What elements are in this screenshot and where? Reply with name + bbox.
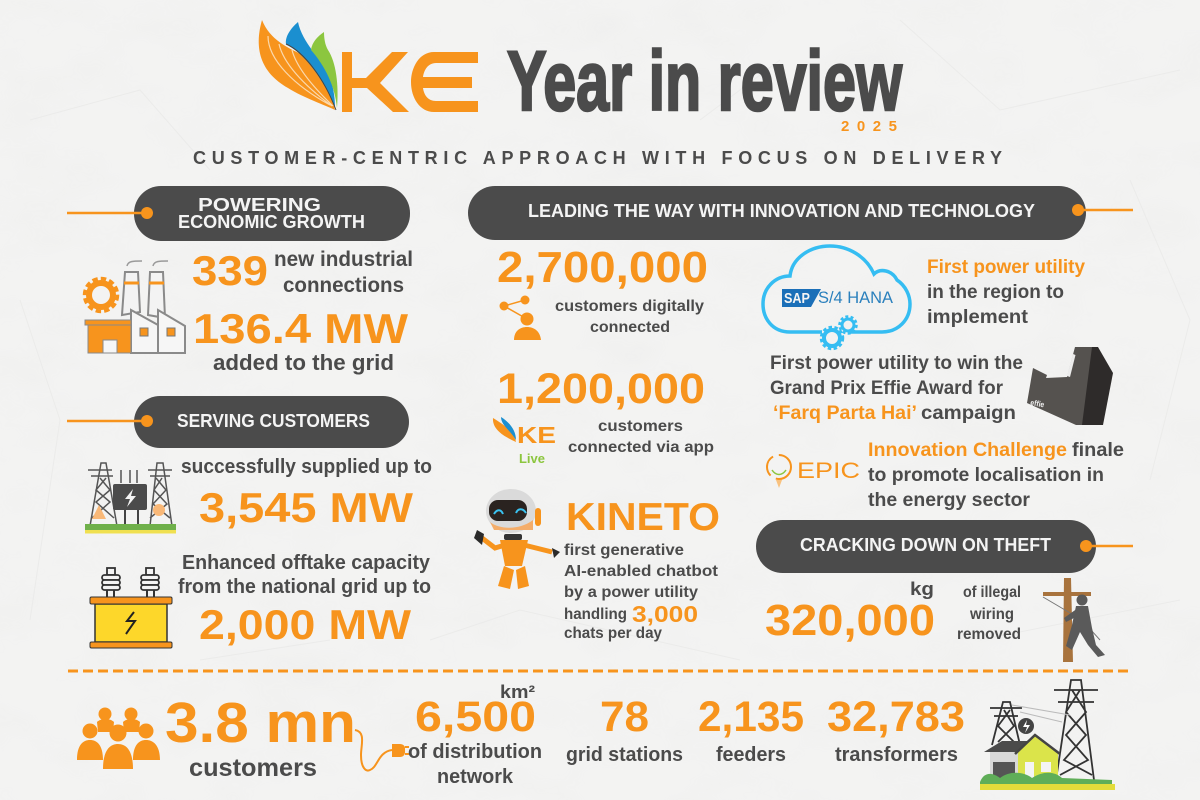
panel: customers total xyxy=(77,691,409,782)
icon: Effie trophy xyxy=(1027,347,1113,425)
stat: 320,000 kg: kg xyxy=(910,579,934,599)
stat: 1,200,000 customers connected via app: connected via app xyxy=(568,439,714,456)
stat: 320,000 kg xyxy=(765,579,935,645)
stat: 2,700,000 customers digitally connected xyxy=(497,243,708,340)
text: enhanced offtake capacity xyxy=(178,552,431,598)
text: Grand Prix Effie Award: First power utility to win the xyxy=(770,353,1023,374)
stat: 136.4 MW added to the grid: 136.4 MW xyxy=(193,305,408,352)
icon: EPIC logo: EPIC xyxy=(797,458,860,483)
stat: 32,783 transformers xyxy=(827,693,965,766)
heading pill: cracking down on theft xyxy=(756,520,1133,573)
stat: 78 grid stations xyxy=(566,693,683,766)
panel: EPIC innovation challenge xyxy=(767,439,1124,511)
icon: worker on pole xyxy=(1043,578,1105,662)
heading pill: powering economic growth xyxy=(67,186,410,241)
stat: 3.8 mn: 3.8 mn xyxy=(165,691,356,755)
panel: serving customers xyxy=(67,396,432,648)
heading pill: serving customers: SERVING CUSTOMERS xyxy=(177,411,370,431)
stat: 6,500 km2 of distribution network: 6,500 xyxy=(415,693,536,741)
heading pill: leading the way with innovation and technology: LEADING THE WAY WITH INNOVATION AND TECHNOLOGY xyxy=(528,201,1035,221)
stat: 2,700,000 customers digitally connected: 2,700,000 xyxy=(497,243,708,292)
stat: 2,700,000 customers digitally connected: customers digitally xyxy=(555,298,704,315)
panel: cracking down on theft xyxy=(756,520,1133,662)
panel: powering economic growth xyxy=(67,186,413,375)
stat: 339 new industrial connections: 339 xyxy=(192,247,268,294)
stat: 6,500 km2 of distribution network xyxy=(408,682,542,788)
text: chatbot description: AI-enabled chatbot xyxy=(564,563,719,580)
panel: KINETO chatbot xyxy=(474,489,720,642)
stat: KINETO: KINETO xyxy=(566,496,720,539)
stat: 1,200,000 customers connected via app xyxy=(493,365,714,466)
stat: 339 new industrial connections: new industrial xyxy=(274,248,413,271)
label: customers: customers xyxy=(189,754,317,782)
stat: 339 new industrial connections: connections xyxy=(283,274,404,297)
logo letters KE xyxy=(342,52,478,112)
text: first power utility in the region xyxy=(927,257,1085,328)
text: of illegal wiring removed: of illegal xyxy=(963,584,1021,601)
stat: 32,783 transformers: transformers xyxy=(835,744,958,766)
panel: Effie award xyxy=(770,347,1113,425)
divider: dashed orange line xyxy=(68,670,1128,672)
heading pill: leading the way with innovation and technology xyxy=(468,186,1133,240)
panel: SAP S/4 HANA xyxy=(763,246,1085,349)
text: innovation challenge finale: Innovation Challenge xyxy=(868,439,1067,461)
text: enhanced offtake capacity: from the national grid up to xyxy=(178,576,431,598)
heading pill: powering economic growth: POWERING xyxy=(198,195,321,215)
icon: yellow transformer xyxy=(90,568,172,648)
icon: house and transmission towers xyxy=(980,680,1115,790)
icon: factory xyxy=(84,261,185,353)
title: Year in review xyxy=(507,34,902,128)
text: of illegal wiring removed: wiring xyxy=(969,606,1014,623)
text: successfully supplied up to: successfully supplied up to xyxy=(181,456,432,478)
icon: cloud with SAP logo and gears: SAP xyxy=(784,291,810,307)
text: innovation challenge finale xyxy=(868,439,1124,511)
icon: robot xyxy=(474,489,560,589)
text: chatbot description: handling xyxy=(564,606,627,623)
stat: 32,783 transformers: 32,783 xyxy=(827,693,965,741)
text: enhanced offtake capacity: Enhanced offtake capacity xyxy=(182,552,431,574)
stat: 2,135 feeders: feeders xyxy=(716,744,786,766)
stat: 2,000 MW: 2,000 MW xyxy=(199,601,411,648)
heading pill: powering economic growth: ECONOMIC GROWTH xyxy=(178,212,365,232)
stat: 2,700,000 customers digitally connected: connected xyxy=(590,319,670,336)
text: innovation challenge finale: to promote localisation in xyxy=(868,464,1104,486)
stat: 320,000 kg: 320,000 xyxy=(765,596,935,645)
stat: 2,135 feeders xyxy=(698,693,804,766)
text: Grand Prix Effie Award: ‘Farq Parta Hai’ xyxy=(773,403,917,424)
tagline: CUSTOMER-CENTRIC APPROACH WITH FOCUS ON DELIVERY xyxy=(193,148,1002,168)
text: Grand Prix Effie Award xyxy=(770,353,1023,424)
text: chatbot description: first generative xyxy=(564,542,684,559)
text: first power utility in the region: in the region to xyxy=(927,282,1064,303)
logo wing feathers xyxy=(259,20,338,110)
stat: 3,545 MW: 3,545 MW xyxy=(199,484,413,531)
icon: connected people xyxy=(500,296,541,340)
icon: plug and cable xyxy=(355,730,409,770)
stat: 2,135 feeders: 2,135 xyxy=(698,693,804,741)
text: innovation challenge finale: the energy sector xyxy=(868,489,1030,511)
text: chatbot description: chats per day xyxy=(564,625,662,642)
icon: transmission towers and transformer xyxy=(85,463,176,534)
stat: 1,200,000 customers connected via app: customers xyxy=(598,418,683,435)
year: 2025 xyxy=(841,118,897,135)
icon: customers group xyxy=(77,708,160,769)
icon: KE Live logo: Live xyxy=(519,451,545,466)
text: innovation challenge finale: finale xyxy=(1072,439,1124,461)
text: Grand Prix Effie Award: campaign xyxy=(921,403,1016,424)
icon: cloud with SAP logo and gears: S/4 HANA xyxy=(818,288,894,307)
icon: cloud with SAP logo and gears xyxy=(763,246,910,349)
stat: 136.4 MW added to the grid: added to the grid xyxy=(213,350,394,375)
text: of illegal wiring removed xyxy=(957,584,1021,643)
heading pill: serving customers xyxy=(67,396,409,448)
stat: 78 grid stations: grid stations xyxy=(566,744,683,766)
icon: EPIC logo xyxy=(767,455,860,488)
stat: 339 new industrial connections xyxy=(192,247,413,297)
stat: 6,500 km2 of distribution network: of distribution xyxy=(408,741,542,763)
text: first power utility in the region: implement xyxy=(927,307,1029,328)
text: chatbot description: 3,000 xyxy=(632,601,698,627)
stat: 1,200,000 customers connected via app: 1,200,000 xyxy=(497,365,705,413)
text: chatbot description: by a power utility xyxy=(564,584,698,601)
stat: 6,500 km2 of distribution network: km² xyxy=(500,682,535,702)
text: first power utility in the region: First power utility xyxy=(927,257,1085,278)
icon: KE Live logo xyxy=(493,417,556,466)
icon: Effie trophy: effie xyxy=(1030,398,1045,409)
stat: 78 grid stations: 78 xyxy=(600,693,649,741)
stat: 6,500 km2 of distribution network: network xyxy=(437,766,514,788)
text: chatbot description xyxy=(564,542,719,642)
icon: KE Live logo: KE xyxy=(517,422,556,448)
logo: KE wing mark xyxy=(259,20,478,112)
stat: 136.4 MW added to the grid xyxy=(193,305,408,375)
text: Grand Prix Effie Award: Grand Prix Effie Award for xyxy=(770,378,1004,399)
text: of illegal wiring removed: removed xyxy=(957,626,1021,643)
heading pill: cracking down on theft: CRACKING DOWN ON THEFT xyxy=(800,535,1051,555)
